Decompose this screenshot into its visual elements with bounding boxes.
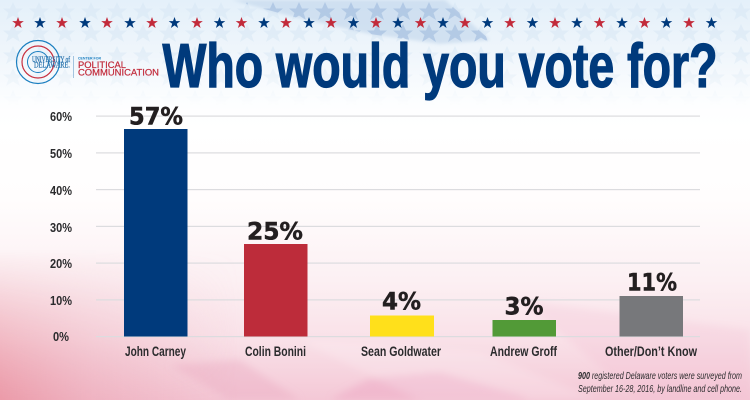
category labels: Other/Don’t Know: [605, 344, 697, 359]
y axis labels: [50, 110, 72, 344]
logo: University of Delaware, Center for Political Communication: CENTER FOR: [78, 56, 101, 60]
bar: Colin Bonini 25%: [244, 244, 308, 336]
bar: Andrew Groff 3%: [492, 320, 556, 336]
logo: University of Delaware, Center for Political Communication: COMMUNICATION: [78, 68, 159, 78]
survey note: [578, 371, 742, 395]
category labels: John Carney: [125, 344, 186, 359]
y axis labels: 10%: [50, 294, 72, 308]
bar chart: [124, 129, 683, 336]
y axis labels: 30%: [50, 221, 72, 235]
logo: University of Delaware, Center for Political Communication: POLITICAL: [78, 60, 126, 70]
y axis labels: 60%: [50, 110, 72, 124]
category labels: Sean Goldwater: [361, 344, 442, 359]
category labels: [125, 344, 697, 359]
y axis labels: 0%: [53, 330, 69, 344]
y axis labels: 50%: [50, 147, 72, 161]
value labels: [129, 102, 677, 320]
logo rings: [16, 40, 60, 84]
logo: University of Delaware, Center for Political Communication: DELAWARE.: [34, 60, 70, 70]
bar: Other/Don't Know 11%: [620, 296, 683, 336]
logo: University of Delaware, Center for Political Communication: [16, 40, 159, 84]
value labels: 3%: [504, 292, 544, 320]
logo wordmark: UNIVERSITY of: [32, 54, 70, 64]
y axis labels: 20%: [50, 257, 72, 271]
bar: Sean Goldwater 4%: [370, 316, 434, 336]
y axis labels: 40%: [50, 184, 72, 198]
gridlines: [96, 116, 700, 337]
value labels: 4%: [382, 288, 421, 316]
category labels: Andrew Groff: [490, 344, 557, 359]
value labels: 25%: [247, 218, 303, 246]
category labels: Colin Bonini: [245, 344, 306, 359]
bar: John Carney 57%: [124, 129, 188, 336]
star row: [12, 17, 717, 28]
value labels: 11%: [627, 268, 677, 296]
value labels: 57%: [129, 102, 183, 130]
